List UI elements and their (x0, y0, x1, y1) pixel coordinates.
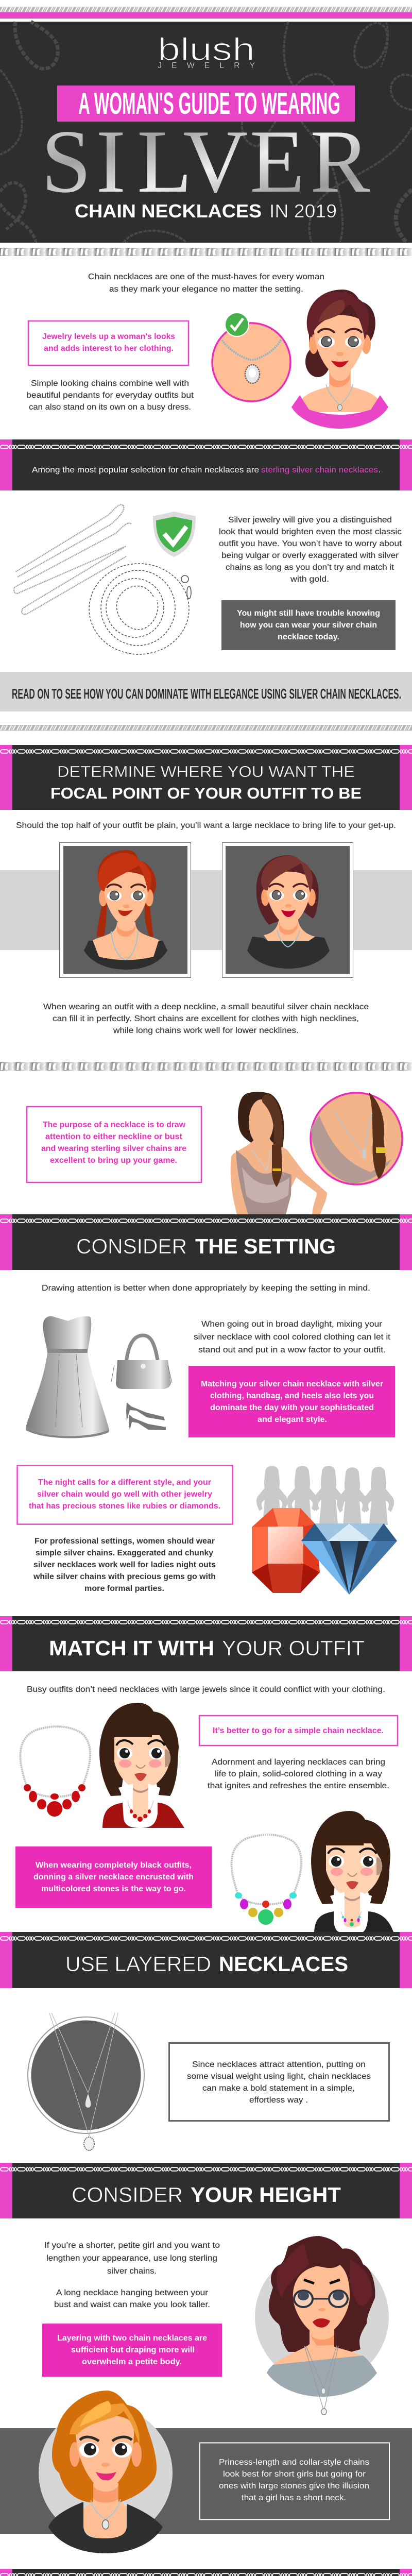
banner: popular selection: . (379, 466, 381, 474)
gray band behind portraits (0, 870, 412, 950)
callout: trouble knowing: You might still have trouble knowing (237, 609, 380, 618)
callout: the night: The night calls for a different style, and your (38, 1478, 211, 1487)
paragraph: petite girl: A long necklace hanging between your (56, 2289, 209, 2297)
woman with orange hair (39, 2391, 173, 2553)
top pink band (0, 12, 412, 19)
text box (200, 2443, 389, 2519)
chain divider (0, 248, 412, 256)
intro text (88, 273, 324, 294)
section heading: match outfit: MATCH IT WITH (49, 1636, 214, 1660)
paragraph: petite girl: silver chains. (107, 2267, 157, 2276)
callout: layering: sufficient but draping more will (71, 2346, 195, 2354)
read on banner (0, 672, 412, 711)
callout: trouble knowing: how you can wear your silver chain (240, 621, 377, 630)
icon: ruby (252, 1508, 320, 1593)
paragraph: simple chains: Simple looking chains combine well with (31, 379, 189, 388)
paragraph: professional settings: more formal parties. (84, 1584, 164, 1593)
woman with braid (231, 1092, 327, 1214)
woman with pink dress (291, 290, 388, 429)
paragraph: silver jewelry: Silver jewelry will give you a distinguished (228, 516, 392, 524)
paragraph: neckline: while long chains work well for lower necklines. (113, 1026, 299, 1035)
red stone necklace (21, 1726, 90, 1817)
paragraph: neckline: can fill it in perfectly. Short chains are excellent for clothes with high necklines, (53, 1014, 359, 1023)
callout: purpose of a necklace: attention to either neckline or bust (45, 1132, 182, 1141)
paragraph: professional settings: while silver chains with precious gems go with (33, 1572, 216, 1581)
callout: jewelry levels up: and adds interest to her clothing. (44, 344, 174, 353)
callout: matching (188, 1366, 395, 1437)
text box: that a girl has a short neck. (242, 2494, 346, 2502)
callout: black outfits: multicolored stones is the way to go. (41, 1885, 186, 1893)
section heading: layered necklaces: NECKLACES (219, 1952, 348, 1976)
paragraph: silver jewelry (219, 516, 402, 584)
icon: diamond (301, 1523, 397, 1595)
top chain border (0, 7, 412, 12)
section heading: focal point: DETERMINE WHERE YOU WANT THE (57, 762, 355, 781)
text box: visual weight: some visual weight using light, chain necklaces (187, 2072, 371, 2081)
paragraph: professional settings: For professional settings, women should wear (35, 1537, 215, 1546)
paragraph: daylight (194, 1320, 391, 1354)
silver heels (126, 1402, 166, 1430)
subtitle: IN 2019 (269, 200, 337, 222)
subtitle (75, 200, 337, 222)
paragraph: adornment: life to plain, solid-colored clothing in a way (215, 1770, 382, 1778)
text box: Princess-length and collar-style chains (219, 2458, 369, 2467)
multicolor stone necklace (232, 1835, 301, 1925)
callout: the night (18, 1465, 233, 1524)
section heading: personality (0, 2569, 412, 2576)
section heading: the setting: CONSIDER (76, 1234, 187, 1258)
section heading: focal point (0, 745, 412, 810)
paragraph: silver jewelry: outfit you have. You won’t have to worry about (219, 539, 402, 548)
chain divider (0, 725, 412, 731)
paragraph: professional settings: silver necklaces work well for ladies night outs (33, 1561, 216, 1569)
paragraph: petite girl: If you’re a shorter, petite girl and you want to (44, 2241, 220, 2250)
text box: visual weight (169, 2043, 389, 2121)
callout: layering (42, 2324, 222, 2377)
close-up circle: braid and pendant (311, 1092, 402, 1184)
section heading: focal point: FOCAL POINT OF YOUR OUTFIT TO BE (50, 784, 362, 802)
callout: purpose of a necklace: excellent to bring up your game. (50, 1156, 177, 1165)
paragraph: adornment (208, 1758, 389, 1790)
silver handbag (111, 1335, 172, 1389)
callout: purpose of a necklace: The purpose of a necklace is to draw (43, 1121, 186, 1129)
paragraph: daylight: When going out in broad daylight, mixing your (201, 1320, 383, 1329)
intro text: Chain necklaces are one of the must-haves for every woman (88, 273, 324, 281)
intro text: as they mark your elegance no matter the setting. (109, 285, 303, 294)
paragraph: silver jewelry: chains as long as you don’t try and match it (226, 563, 394, 572)
text box: visual weight: Since necklaces attract attention, putting on (192, 2060, 366, 2069)
portrait: red hair, long chain (60, 843, 191, 978)
paragraph: professional settings: simple silver chains. Exaggerated and chunky (36, 1549, 213, 1557)
subtitle: CHAIN NECKLACES (75, 200, 262, 222)
paragraph: petite girl: lengthen your appearance, use long sterling (46, 2254, 217, 2263)
paragraph: adornment: that ignites and refreshes the entire ensemble. (208, 1782, 389, 1790)
section heading: the setting: THE SETTING (195, 1234, 336, 1258)
paragraph: simple chains: can also stand on its own on a busy dress. (29, 403, 191, 412)
paragraph: neckline (43, 1003, 369, 1035)
portrait: brown bob, short chain (222, 843, 353, 978)
paragraph: daylight: silver necklace with cool colored clothing can let it (194, 1333, 391, 1342)
text box: visual weight: effortless way . (249, 2096, 308, 2105)
section heading: layered necklaces (0, 1932, 412, 1988)
logo: blush jewelry: blush (158, 32, 255, 67)
chain divider (0, 1062, 412, 1071)
callout: purpose of a necklace: and wearing sterling silver chains are (41, 1144, 186, 1153)
callout: matching: Matching your silver chain necklace with silver (201, 1380, 383, 1388)
paragraph: silver jewelry: with gold. (290, 575, 329, 584)
callout: trouble knowing (221, 600, 396, 650)
gray panel: princess length (0, 2428, 412, 2534)
spiral chain (89, 564, 191, 654)
callout: jewelry levels up: Jewelry levels up a woman's looks (42, 332, 175, 341)
paragraph: silver jewelry: being vulgar or overly exaggerated with silver (221, 551, 399, 560)
text: plain outfit: Should the top half of your outfit be plain, you’ll want a large necklace to bring life to your get-up. (16, 821, 396, 830)
section heading: your height (0, 2163, 412, 2218)
silver chains image (14, 505, 131, 614)
paragraph: neckline: When wearing an outfit with a deep neckline, a small beautiful silver chain necklace (43, 1003, 369, 1011)
callout: simple chain: It’s better to go for a simple chain necklace. (213, 1726, 384, 1735)
text box: visual weight: can make a bold statement in a simple, (202, 2084, 355, 2093)
text box: ones with large stones give the illusion (219, 2482, 369, 2490)
section heading: your height: YOUR HEIGHT (191, 2183, 341, 2207)
decorative chain loops (0, 18, 412, 243)
banner: popular selection: Among the most popular selection for chain necklaces are (32, 466, 259, 474)
text box: look best for short girls but going for (223, 2470, 366, 2479)
text: busy outfits: Busy outfits don’t need necklaces with large jewels since it could conflict with your clothing. (27, 1685, 385, 1694)
paragraph: silver jewelry: look that would brighten even the most classic (219, 528, 402, 536)
section heading: match outfit: YOUR OUTFIT (222, 1636, 365, 1660)
callout: simple chain (199, 1716, 398, 1745)
callout: trouble knowing: necklace today. (278, 633, 339, 641)
callout: matching: clothing, handbag, and heels also lets you (210, 1392, 374, 1400)
callout: black outfits: donning a silver necklace encrusted with (33, 1873, 194, 1882)
logo: blush jewelry: JEWELRY (158, 61, 255, 70)
women silhouettes (256, 1466, 394, 1526)
callout: the night: silver chain would go well with other jewelry (37, 1490, 212, 1499)
paragraph: simple chains (26, 379, 194, 412)
section heading: the setting (0, 1214, 412, 1270)
icon: green shield (153, 512, 196, 557)
header panel (0, 18, 412, 243)
callout: black outfits: When wearing completely black outfits, (36, 1861, 192, 1870)
section heading: match outfit (0, 1616, 412, 1671)
callout: matching: dominate the day with your sophisticated (210, 1403, 374, 1412)
paragraph: simple chains: beautiful pendants for everyday outfits but (26, 391, 194, 400)
text: drawing attention: Drawing attention is better when done appropriately by keeping the setting in mind. (42, 1284, 370, 1293)
banner: popular selection: sterling silver chain necklaces (261, 466, 378, 474)
banner: popular selection (0, 439, 412, 490)
callout: matching: and elegant style. (258, 1415, 327, 1424)
callout: layering: overwhelm a petite body. (82, 2358, 182, 2366)
silver wordmark: SILVER (41, 111, 370, 211)
callout: black outfits (15, 1846, 212, 1908)
woman with black top (311, 1811, 393, 1932)
paragraph: daylight: stand out and put in a wow factor to your outfit. (198, 1346, 386, 1354)
section heading: layered necklaces: USE LAYERED (65, 1952, 211, 1976)
section heading: your height: CONSIDER (72, 2183, 183, 2207)
layered necklaces circle (28, 2013, 144, 2150)
silver dress (26, 1316, 109, 1438)
icon: green check (225, 313, 249, 336)
necklace close-up circle (212, 313, 290, 401)
callout: the night: that has precious stones like rubies or diamonds. (29, 1502, 220, 1511)
callout: jewelry levels up (28, 321, 188, 365)
woman with red top (99, 1703, 184, 1828)
callout: layering: Layering with two chain necklaces are (57, 2334, 207, 2343)
woman with glasses and long chains (255, 2236, 389, 2415)
paragraph: adornment: Adornment and layering necklaces can bring (212, 1758, 385, 1767)
callout: purpose of a necklace (27, 1107, 201, 1182)
paragraph: petite girl (44, 2241, 220, 2309)
paragraph: professional settings (33, 1537, 216, 1593)
paragraph: petite girl: bust and waist can make you look taller. (54, 2300, 210, 2309)
